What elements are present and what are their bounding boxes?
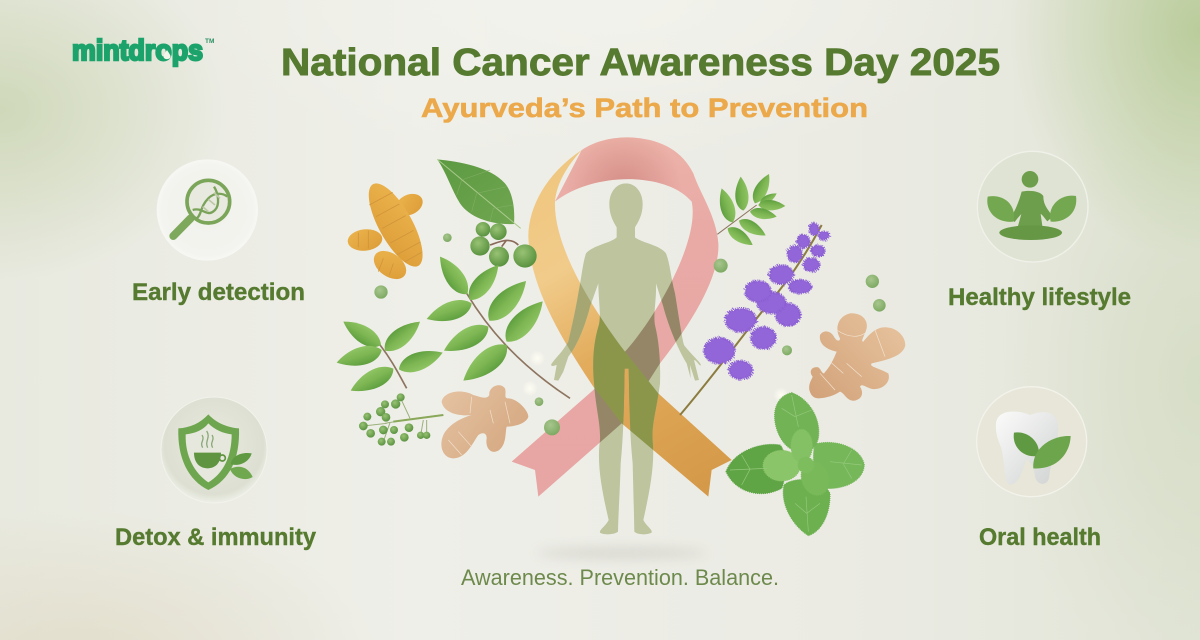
icon: magnifying glass with DNA (157, 159, 258, 261)
floating balls (714, 259, 886, 355)
small branch (715, 171, 786, 250)
ginger root (441, 385, 528, 458)
ginger root (809, 313, 905, 401)
small floating balls (374, 233, 560, 435)
shadow under figure (537, 548, 707, 558)
label: Healthy lifestyle (948, 284, 1131, 311)
panel: healthy lifestyle (948, 151, 1131, 311)
herbs right: leaves, lavender, ginger, mint (680, 171, 905, 536)
title: National Cancer Awareness Day 2025 (281, 42, 1000, 84)
logo: mintdrops (72, 35, 203, 67)
leafy branch left (334, 315, 446, 399)
logo: TM (205, 38, 214, 45)
leafy branch center (424, 252, 570, 398)
tagline: Awareness. Prevention. Balance. (461, 565, 779, 590)
panel: early detection (132, 159, 305, 306)
icon: tooth with leaves (977, 387, 1087, 497)
icon: shield with cup (161, 397, 267, 503)
tiny berry cluster (359, 393, 443, 446)
lavender sprig (680, 223, 829, 415)
panel: oral health (977, 387, 1101, 551)
berries (470, 222, 537, 268)
human figure (551, 184, 701, 534)
mint sprig (726, 387, 864, 536)
large leaf (437, 159, 521, 228)
panel: detox and immunity (115, 397, 317, 551)
glow spots (522, 350, 545, 396)
icon: meditating figure with leaves (977, 151, 1088, 262)
subtitle: Ayurveda’s Path to Prevention (421, 93, 868, 123)
turmeric root (347, 176, 433, 285)
awareness ribbon (512, 137, 732, 497)
label: Oral health (979, 524, 1101, 551)
label: Detox & immunity (115, 524, 317, 551)
herbs left: turmeric, leaves, berries, ginger (334, 159, 570, 458)
label: Early detection (132, 279, 305, 306)
